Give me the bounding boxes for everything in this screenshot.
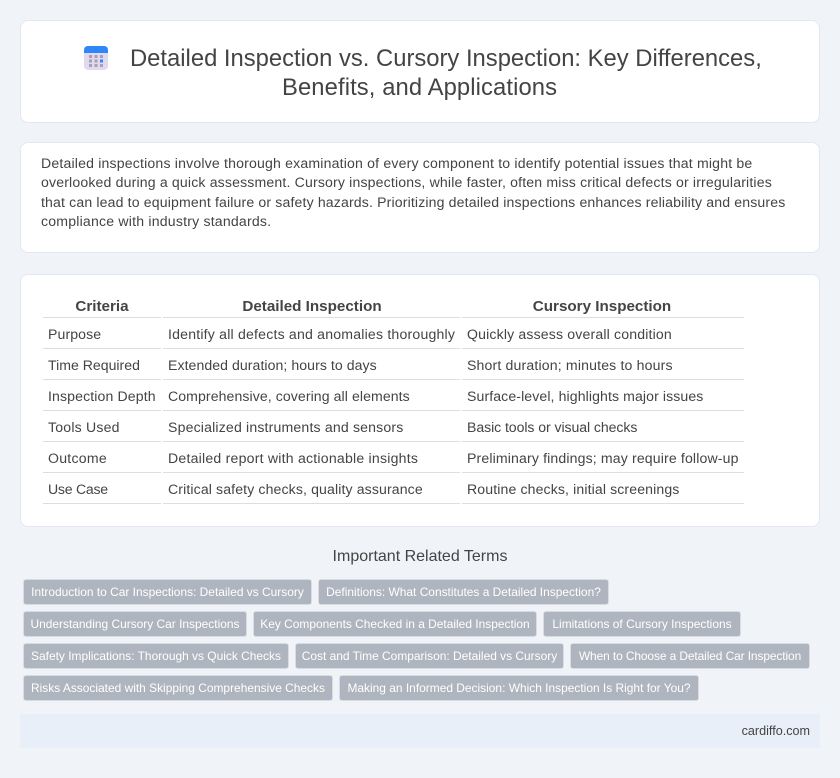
table header: Detailed Inspection xyxy=(242,298,382,315)
row: purpose xyxy=(48,326,672,342)
row: purpose: Quickly assess overall condition xyxy=(467,326,672,342)
row: outcome: Outcome xyxy=(48,450,107,466)
row: tools used: Tools Used xyxy=(48,419,120,435)
icon: calendar xyxy=(84,46,108,70)
panel: intro paragraph xyxy=(20,142,820,253)
tag xyxy=(570,643,810,669)
tag: Safety Implications: Thorough vs Quick Checks xyxy=(31,649,281,663)
tag xyxy=(253,611,537,637)
row: use case: Routine checks, initial screenings xyxy=(467,481,679,497)
row: time required: Short duration; minutes to hours xyxy=(467,357,673,373)
table header: Criteria xyxy=(75,298,129,315)
row: time required xyxy=(48,357,673,373)
panel: title header xyxy=(20,20,820,123)
tag: Key Components Checked in a Detailed Inspection xyxy=(260,617,530,631)
tag xyxy=(23,643,289,669)
row: outcome: Detailed report with actionable insights xyxy=(168,450,418,466)
tag xyxy=(318,579,609,605)
row: outcome: Preliminary findings; may require follow-up xyxy=(467,450,739,466)
tag: Understanding Cursory Car Inspections xyxy=(30,617,240,631)
title line 2: Benefits, and Applications xyxy=(282,74,557,101)
row: outcome xyxy=(48,450,739,466)
tag: Limitations of Cursory Inspections xyxy=(552,617,732,631)
title line 1: Detailed Inspection vs. Cursory Inspection: Key Differences, xyxy=(130,45,762,72)
text line 1: Detailed inspections involve thorough examination of every component to identify potential issues that might be xyxy=(41,155,752,171)
tag: When to Choose a Detailed Car Inspection xyxy=(579,649,801,663)
tag xyxy=(295,643,564,669)
tag xyxy=(23,675,333,701)
row: tools used xyxy=(48,419,637,435)
text line 3: that can lead to equipment failure or safety hazards. Prioritizing detailed inspections enhances reliability and ensures xyxy=(41,194,785,210)
row: use case: Use Case xyxy=(48,481,108,497)
row: inspection depth: Comprehensive, covering all elements xyxy=(168,388,410,404)
tag list: related terms xyxy=(23,579,810,701)
row: use case xyxy=(48,481,679,497)
row: use case: Critical safety checks, quality assurance xyxy=(168,481,423,497)
row: time required: Time Required xyxy=(48,357,140,373)
text line 2: overlooked during a quick assessment. Cursory inspections, while faster, often miss critical defects or irregularities xyxy=(41,174,772,190)
row: inspection depth: Inspection Depth xyxy=(48,388,156,404)
heading: important related terms: Important Related Terms xyxy=(333,548,507,565)
row: tools used: Basic tools or visual checks xyxy=(467,419,637,435)
row: purpose: Purpose xyxy=(48,326,101,342)
tag xyxy=(339,675,699,701)
tag: Introduction to Car Inspections: Detailed vs Cursory xyxy=(31,585,304,599)
tag xyxy=(23,611,247,637)
footer text: cardiffo.com xyxy=(742,724,810,738)
row: inspection depth: Surface-level, highlights major issues xyxy=(467,388,703,404)
tag: Risks Associated with Skipping Comprehensive Checks xyxy=(31,681,325,695)
tag: Definitions: What Constitutes a Detailed Inspection? xyxy=(326,585,601,599)
row: inspection depth xyxy=(48,388,703,404)
panel: comparison table xyxy=(20,274,820,527)
text line 4: compliance with industry standards. xyxy=(41,213,271,229)
row: tools used: Specialized instruments and sensors xyxy=(168,419,403,435)
table header xyxy=(75,298,671,315)
tag: Cost and Time Comparison: Detailed vs Cursory xyxy=(302,649,557,663)
tag xyxy=(23,579,312,605)
row: time required: Extended duration; hours to days xyxy=(168,357,377,373)
row: purpose: Identify all defects and anomalies thoroughly xyxy=(168,326,455,342)
tag xyxy=(543,611,741,637)
footer bar xyxy=(20,714,820,748)
tag: Making an Informed Decision: Which Inspection Is Right for You? xyxy=(347,681,691,695)
table header: Cursory Inspection xyxy=(533,298,671,315)
